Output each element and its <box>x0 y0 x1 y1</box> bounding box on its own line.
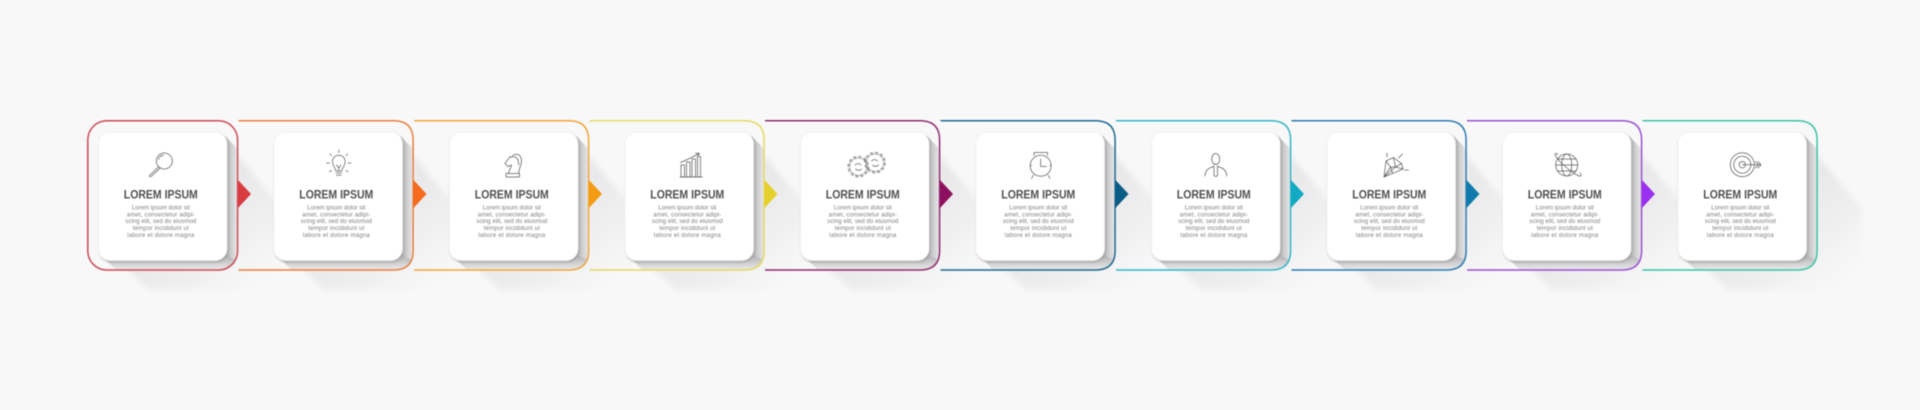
body text: labore et dolore magna <box>1005 232 1072 239</box>
body text: tempor incididunt ut <box>484 225 540 232</box>
heading: LOREM IPSUM <box>1528 188 1602 202</box>
frame <box>238 121 413 270</box>
body text: scing elit, sed do eiusmod <box>1003 218 1074 225</box>
body text: Lorem ipsum dolor sit <box>658 204 717 212</box>
heading: LOREM IPSUM <box>124 188 198 202</box>
icon: light bulb <box>326 150 351 175</box>
body text: scing elit, sed do eiusmod <box>476 218 547 225</box>
frame <box>1116 121 1291 270</box>
body text: labore et dolore magna <box>1356 232 1423 239</box>
icon: chess knight <box>505 154 522 177</box>
body text: Lorem ipsum dolor sit <box>1185 204 1243 212</box>
body text: Lorem ipsum dolor sit <box>1536 204 1594 212</box>
arrow <box>1291 180 1304 208</box>
body text: tempor incididunt ut <box>133 225 189 232</box>
icon: alarm clock <box>1030 152 1051 178</box>
body text: amet, consectetur adipi- <box>1004 211 1072 218</box>
icon: diamond <box>1384 153 1408 177</box>
body text: Lorem ipsum dolor sit <box>307 204 366 212</box>
body text: amet, consectetur adipi- <box>478 211 546 218</box>
body text <box>125 204 196 239</box>
body text: Lorem ipsum dolor sit <box>1711 204 1770 212</box>
step 6: clock <box>940 121 1160 290</box>
icon: person with tie <box>1205 154 1227 176</box>
frame <box>765 121 940 270</box>
frame <box>590 121 764 270</box>
card with shadow <box>1678 132 1862 290</box>
body text <box>827 204 898 239</box>
heading: LOREM IPSUM <box>1177 188 1251 202</box>
step 9: globe <box>1467 121 1686 290</box>
heading: LOREM IPSUM <box>1001 188 1075 202</box>
body text: labore et dolore magna <box>1707 232 1774 239</box>
arrow <box>1466 180 1480 208</box>
body text <box>1705 204 1776 239</box>
frame <box>88 121 238 270</box>
step 1: search <box>88 121 282 290</box>
frame <box>414 121 589 270</box>
body text: amet, consectetur adipi- <box>127 211 195 218</box>
body text: labore et dolore magna <box>127 232 195 239</box>
body text <box>1354 204 1425 239</box>
step 3: strategy <box>414 121 633 290</box>
body text: scing elit, sed do eiusmod <box>1529 218 1600 225</box>
arrow <box>238 180 251 208</box>
body text <box>301 204 372 239</box>
body text: tempor incididunt ut <box>1361 225 1418 232</box>
body text: tempor incididunt ut <box>1010 225 1067 232</box>
heading: LOREM IPSUM <box>1352 188 1426 202</box>
body text: Lorem ipsum dolor sit <box>1009 204 1068 212</box>
body text: scing elit, sed do eiusmod <box>827 218 898 225</box>
body text: labore et dolore magna <box>1180 232 1248 239</box>
step 10: target <box>1642 121 1862 290</box>
body text: labore et dolore magna <box>654 232 721 239</box>
body text: Lorem ipsum dolor sit <box>483 204 541 212</box>
step 5: gears <box>765 121 984 290</box>
body text: Lorem ipsum dolor sit <box>132 204 190 212</box>
heading: LOREM IPSUM <box>1703 188 1777 202</box>
card with shadow <box>274 132 458 290</box>
heading: LOREM IPSUM <box>826 188 900 202</box>
arrow <box>1116 180 1128 208</box>
step 4: growth chart <box>590 121 808 290</box>
frame <box>940 121 1115 270</box>
body text: amet, consectetur adipi- <box>1531 211 1599 218</box>
card with shadow <box>800 132 984 290</box>
body text <box>1529 204 1600 239</box>
body text <box>652 204 723 239</box>
icon: target with arrow <box>1730 153 1761 177</box>
body text: tempor incididunt ut <box>1537 225 1593 232</box>
card with shadow <box>450 132 633 290</box>
body text: amet, consectetur adipi- <box>302 211 370 218</box>
body text: scing elit, sed do eiusmod <box>652 218 723 225</box>
card with shadow <box>1327 132 1510 290</box>
arrow <box>414 180 426 208</box>
arrow <box>764 180 778 208</box>
body text: tempor incididunt ut <box>308 225 365 232</box>
body text: amet, consectetur adipi- <box>653 211 721 218</box>
card with shadow <box>98 132 282 290</box>
step 7: person <box>1116 121 1335 290</box>
body text: amet, consectetur adipi- <box>1706 211 1774 218</box>
icon: globe with orbit <box>1555 153 1581 176</box>
body text: scing elit, sed do eiusmod <box>1178 218 1249 225</box>
body text: scing elit, sed do eiusmod <box>1354 218 1425 225</box>
arrow <box>589 180 602 208</box>
body text <box>1178 204 1249 239</box>
body text: scing elit, sed do eiusmod <box>125 218 196 225</box>
card with shadow <box>625 132 808 290</box>
icon: gears <box>848 152 885 177</box>
body text: tempor incididunt ut <box>835 225 891 232</box>
frame <box>1642 121 1817 270</box>
body text: labore et dolore magna <box>829 232 897 239</box>
body text: scing elit, sed do eiusmod <box>1705 218 1776 225</box>
step 2: idea <box>238 121 458 290</box>
icon: magnifier <box>149 153 172 177</box>
body text <box>476 204 547 239</box>
body text: amet, consectetur adipi- <box>1180 211 1248 218</box>
card with shadow <box>1502 132 1686 290</box>
body text: tempor incididunt ut <box>659 225 716 232</box>
heading: LOREM IPSUM <box>299 188 373 202</box>
body text: scing elit, sed do eiusmod <box>301 218 372 225</box>
body text: tempor incididunt ut <box>1186 225 1242 232</box>
body text: amet, consectetur adipi- <box>829 211 897 218</box>
body text: labore et dolore magna <box>1531 232 1599 239</box>
frame <box>1292 121 1466 270</box>
card with shadow <box>976 132 1160 290</box>
arrow <box>940 180 953 208</box>
icon: bar chart <box>680 153 702 177</box>
body text: labore et dolore magna <box>478 232 546 239</box>
body text: labore et dolore magna <box>303 232 370 239</box>
body text: tempor incididunt ut <box>1712 225 1769 232</box>
heading: LOREM IPSUM <box>650 188 724 202</box>
body text <box>1003 204 1074 239</box>
body text: Lorem ipsum dolor sit <box>1360 204 1419 212</box>
body text: amet, consectetur adipi- <box>1355 211 1423 218</box>
heading: LOREM IPSUM <box>475 188 549 202</box>
body text: Lorem ipsum dolor sit <box>834 204 892 212</box>
frame <box>1467 121 1642 270</box>
card with shadow <box>1152 132 1335 290</box>
arrow <box>1642 180 1655 208</box>
step 8: diamond <box>1292 121 1510 290</box>
